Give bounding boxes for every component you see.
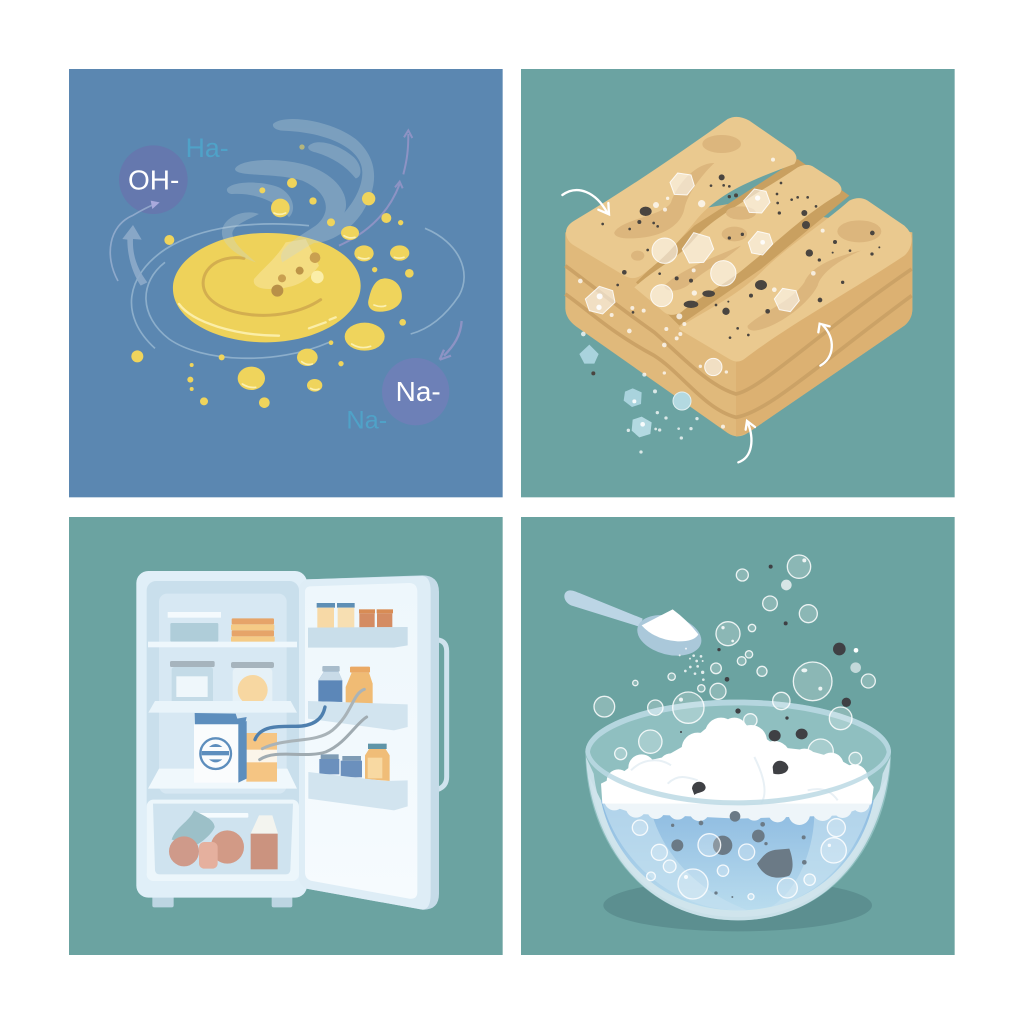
top strip left: [566, 117, 796, 278]
dark dirt particles: [680, 565, 851, 795]
foam shading: [631, 757, 838, 804]
water: [601, 800, 874, 910]
shelf three: [148, 769, 297, 789]
ion circle: OH-: [119, 145, 188, 214]
shelf two: [148, 701, 297, 713]
bowl back: [585, 700, 891, 920]
ion circle: Na-: [382, 358, 449, 425]
door shelf two: [308, 701, 408, 730]
baking soda box: [194, 713, 247, 783]
bubbles: [594, 555, 875, 900]
door bottles middle: [318, 666, 373, 704]
oil droplets: [131, 144, 414, 408]
top strip right: [679, 198, 912, 361]
fridge body: [136, 571, 307, 898]
top strip middle: [634, 165, 841, 315]
middle jars: [170, 661, 274, 705]
water light bands: [603, 804, 872, 910]
odor wisps: [255, 689, 367, 760]
white arrows: [562, 190, 832, 462]
bowl outline: [586, 757, 890, 920]
bowl shadow: [603, 879, 872, 931]
layered block: [565, 117, 912, 437]
panel: scrubbing with crystals: [521, 69, 955, 497]
arrow: toward Na-: [440, 321, 462, 360]
door bottles lower: [319, 744, 390, 781]
panel: baking soda bowl: [521, 517, 955, 955]
arrows: purple upward motion: [339, 130, 412, 246]
soda foam: [601, 718, 874, 825]
fridge feet: [152, 895, 292, 907]
panel: oil and ions: [69, 69, 503, 497]
white flecks: [578, 158, 825, 454]
door handle: [437, 640, 447, 790]
ion circle: OH-: OH-: [128, 165, 179, 196]
ion circle: Na-: Na-: [396, 376, 441, 407]
steam swirls: [222, 119, 374, 262]
falling soda grains: [679, 648, 705, 681]
worn patches: [614, 135, 881, 331]
bowl wall glass: [589, 777, 887, 917]
door shelf one: [308, 627, 408, 648]
bowl rim: [585, 700, 891, 805]
shelf one: [148, 642, 297, 647]
faint label: Na-: Na-: [346, 406, 387, 434]
open door: [299, 575, 439, 910]
door shelf three: [308, 772, 408, 810]
oil slick: [173, 233, 361, 342]
arrow: to OH-: [151, 201, 160, 209]
panel: open fridge: [69, 517, 503, 955]
arrow: large upward swirl: [122, 225, 147, 286]
upper shelf items: [168, 612, 275, 642]
swirling ripples: [110, 203, 464, 358]
lower drawer: [147, 800, 299, 881]
spoon: [564, 590, 706, 662]
dirt specks: [591, 174, 880, 375]
orange box behind soda: [246, 733, 277, 782]
door jars top: [317, 603, 393, 628]
baking soda crystals: [579, 173, 799, 437]
faint label: Ha-: Ha-: [186, 133, 229, 163]
submerged dirt: [671, 811, 807, 898]
